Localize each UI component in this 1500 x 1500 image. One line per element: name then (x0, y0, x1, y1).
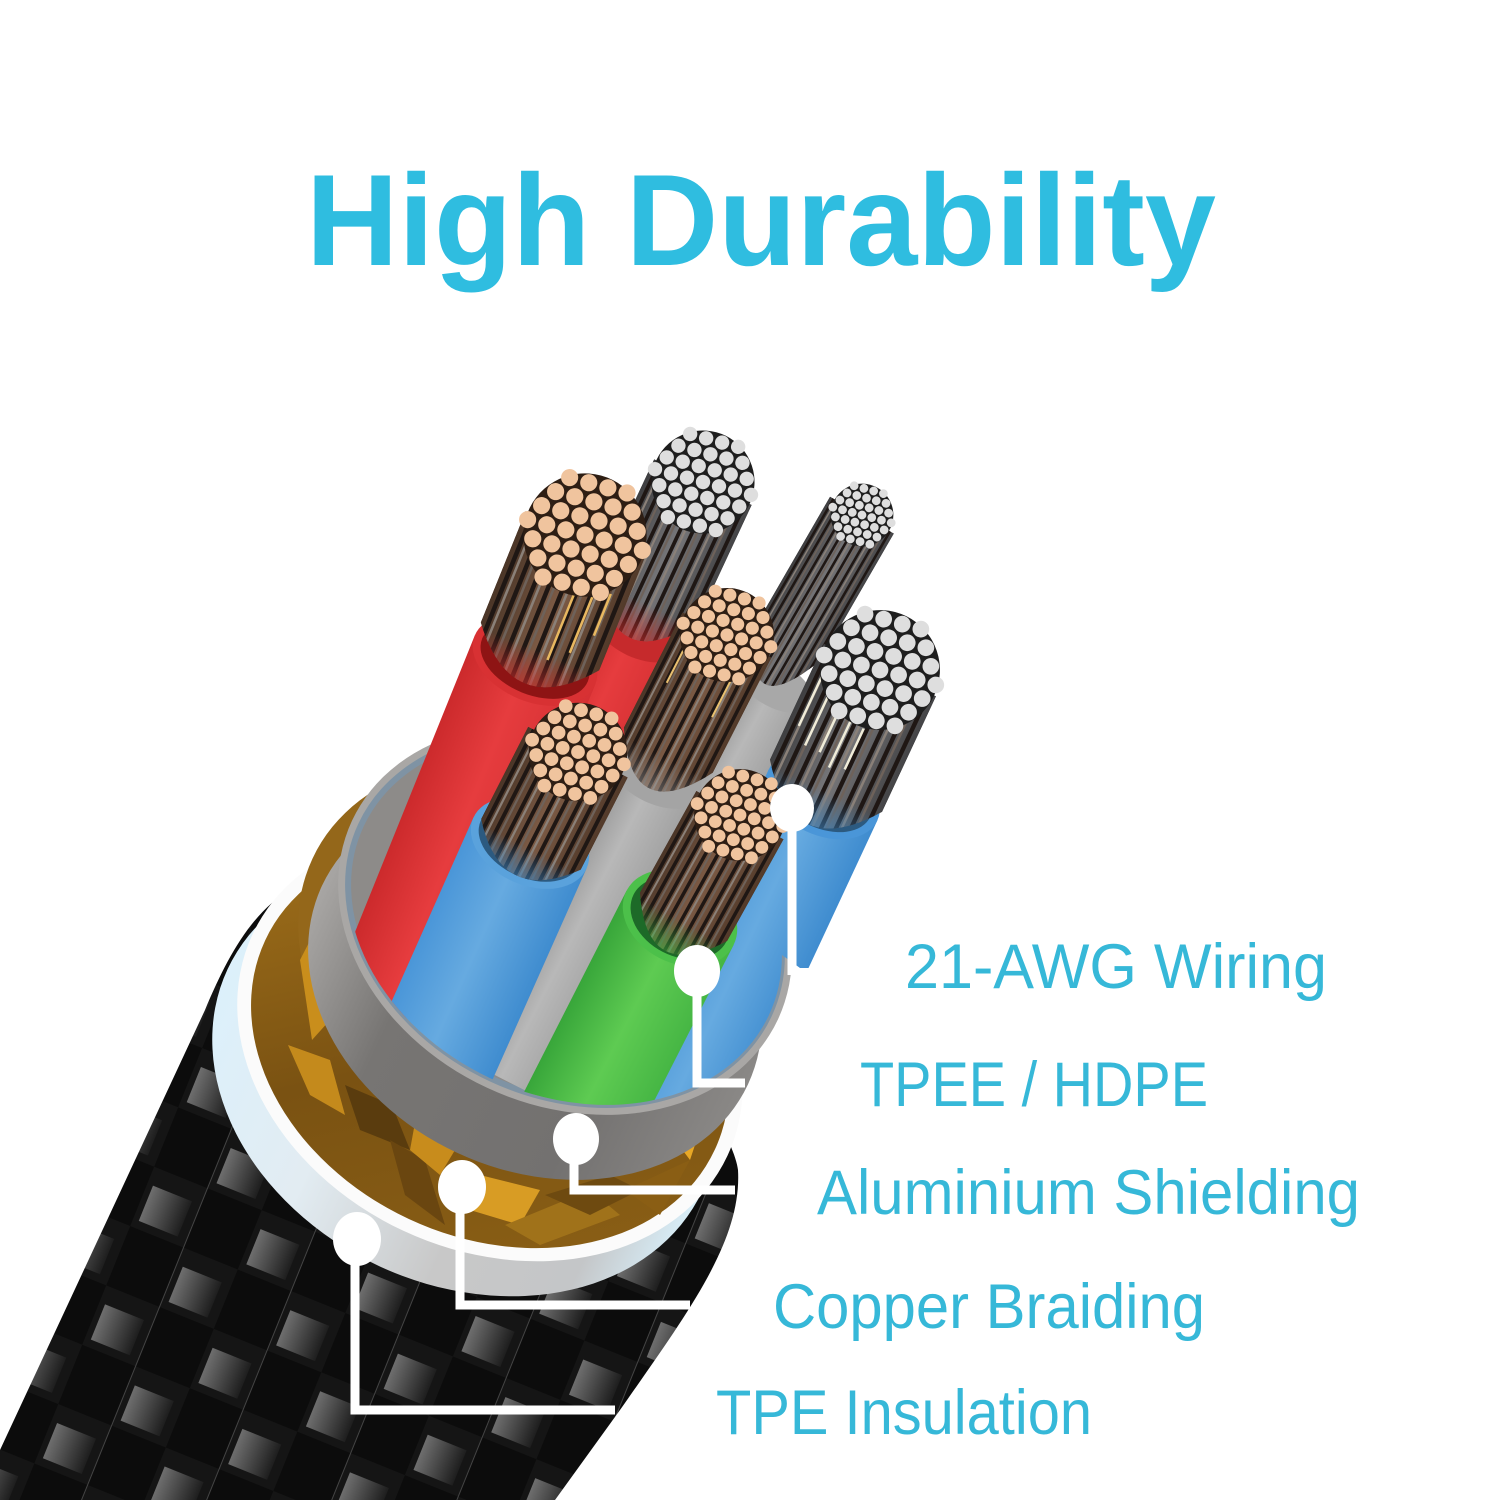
wire: front green with copper conductor (524, 766, 787, 1105)
callout: TPE Insulation (333, 1212, 1092, 1448)
copper braiding (184, 686, 828, 1324)
inner wires (355, 426, 944, 1105)
callout: TPE Insulation: TPE Insulation (716, 1378, 1092, 1448)
callout: Aluminium Shielding (553, 1113, 1360, 1228)
callout: Copper Braiding: Copper Braiding (773, 1272, 1205, 1342)
title: High Durability (306, 147, 1216, 293)
callout: TPEE / HDPE: TPEE / HDPE (860, 1050, 1208, 1120)
callout: Copper Braiding (438, 1160, 1205, 1342)
wire: rear red with silver conductor (588, 426, 758, 736)
callout: 21-AWG Wiring: 21-AWG Wiring (905, 932, 1327, 1002)
callout: 21-AWG Wiring (770, 784, 1327, 1002)
wire: front red with copper conductor (355, 469, 651, 1018)
callout: TPEE / HDPE (674, 945, 1208, 1120)
TPE insulation ring (141, 748, 814, 1377)
aluminium shielding (244, 653, 856, 1252)
wire: right blue with silver conductor (634, 606, 944, 1104)
cable illustration (0, 418, 959, 1500)
wire: left blue with copper conductor (392, 699, 631, 1080)
wire: centre grey with copper conductor (494, 584, 778, 1098)
wire: rear grey with thin silver conductor (573, 476, 904, 1003)
callout: Aluminium Shielding: Aluminium Shielding (817, 1158, 1360, 1228)
braided black outer jacket (0, 885, 738, 1500)
